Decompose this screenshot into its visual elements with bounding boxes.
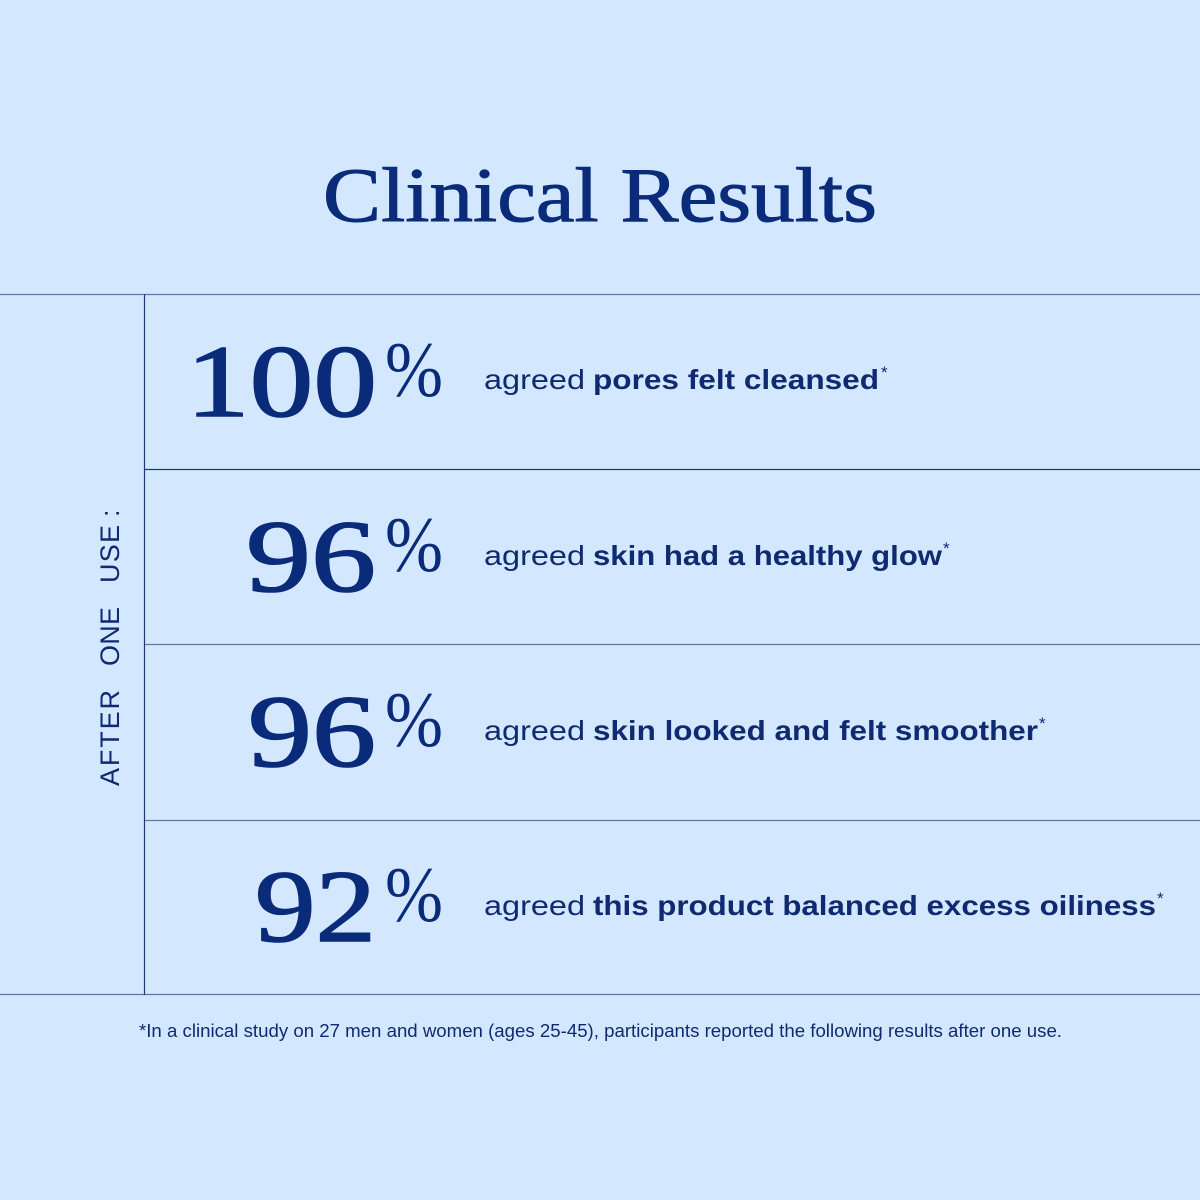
- row: 96% healthy glow: *: [943, 539, 950, 558]
- row: 96% smoother: %: [385, 676, 443, 763]
- row: 100% pores felt cleansed: [186, 325, 888, 439]
- row: 96% smoother: *: [1039, 714, 1046, 733]
- footnote: *In a clinical study on 27 men and women (ages 25-45), participants reported the following results after one use.: [139, 1021, 1062, 1041]
- title: Clinical Results: [323, 152, 877, 238]
- row: 96% smoother: 96: [248, 675, 376, 789]
- row: 92% oiliness: this product balanced excess oiliness: [593, 890, 1156, 921]
- side label: after one use: [95, 509, 125, 786]
- row: 92% oiliness: 92: [255, 850, 376, 964]
- row: 100% pores felt cleansed: agreed: [484, 364, 585, 395]
- row: 100% pores felt cleansed: 100: [186, 325, 377, 439]
- row: 100% pores felt cleansed: pores felt cleansed: [593, 364, 879, 395]
- row: 92% oiliness: %: [385, 851, 443, 938]
- row: 92% oiliness: [255, 850, 1164, 964]
- side label: after one use: :: [95, 509, 125, 517]
- row: 92% oiliness: agreed: [484, 890, 585, 921]
- row: 96% healthy glow: 96: [246, 500, 376, 614]
- row: 96% healthy glow: skin had a healthy glow: [593, 540, 942, 571]
- row: 92% oiliness: *: [1157, 889, 1164, 908]
- row: 96% healthy glow: %: [385, 501, 443, 588]
- side label: after one use: AFTER: [95, 690, 125, 786]
- row: 96% healthy glow: [246, 500, 950, 614]
- row: 96% smoother: agreed: [484, 715, 585, 746]
- row: 96% smoother: skin looked and felt smoother: [593, 715, 1038, 746]
- row: 100% pores felt cleansed: %: [385, 326, 443, 413]
- row: 96% smoother: [248, 675, 1046, 789]
- side label: after one use: ONE: [95, 607, 125, 666]
- side label: after one use: USE: [95, 525, 125, 583]
- row: 96% healthy glow: agreed: [484, 540, 585, 571]
- row: 100% pores felt cleansed: *: [881, 363, 888, 382]
